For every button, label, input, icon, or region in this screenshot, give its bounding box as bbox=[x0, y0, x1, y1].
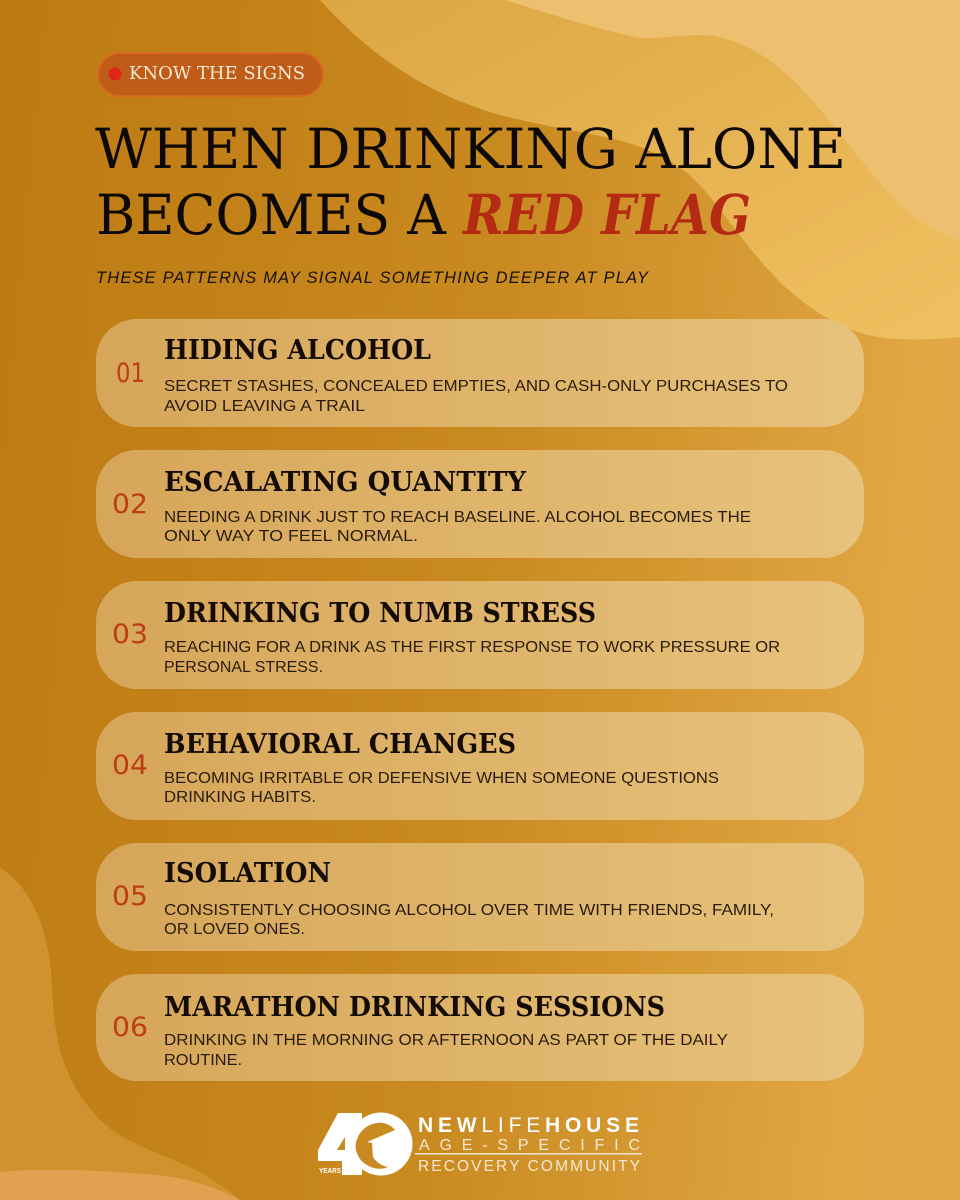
logo: New Life House bbox=[318, 1112, 642, 1176]
panel: sign 02 escalating quantity: NEEDING A DRINK JUST TO REACH BASELINE. ALCOHOL BECOMES THE bbox=[164, 509, 751, 526]
panel: sign 03 drinking to numb stress bbox=[96, 581, 864, 689]
logo: New Life House: RECOVERY COMMUNITY bbox=[418, 1158, 640, 1175]
panel: sign 06 marathon drinking sessions: 06 bbox=[112, 1012, 148, 1043]
subtitle: THESE PATTERNS MAY SIGNAL SOMETHING DEEPER AT PLAY bbox=[96, 269, 649, 287]
decorative blob: top right inner bbox=[505, 0, 960, 240]
title: BECOMES A bbox=[96, 183, 447, 247]
panel: sign 06 marathon drinking sessions: DRINKING IN THE MORNING OR AFTERNOON AS PART OF THE DAILY bbox=[164, 1032, 728, 1049]
panel: sign 02 escalating quantity: 02 bbox=[112, 489, 148, 520]
logo: New Life House: AGE-SPECIFIC bbox=[419, 1137, 640, 1154]
panel: sign 04 behavioral changes bbox=[96, 712, 864, 820]
panel: sign 03 drinking to numb stress: 03 bbox=[112, 619, 148, 650]
icon: 40 years mark bbox=[318, 1112, 412, 1176]
panel: sign 05 isolation: ISOLATION bbox=[164, 858, 331, 889]
panel: sign 06 marathon drinking sessions: ROUTINE. bbox=[164, 1052, 242, 1069]
badge: know the signs bbox=[98, 53, 323, 96]
panel: sign 01 hiding alcohol: HIDING ALCOHOL bbox=[164, 335, 431, 366]
title bbox=[95, 117, 846, 247]
decorative blob: bottom left corner bbox=[0, 1170, 240, 1200]
panel: sign 03 drinking to numb stress: PERSONAL STRESS. bbox=[164, 659, 323, 676]
decorative blob: bottom left bbox=[0, 868, 240, 1200]
panel: sign 05 isolation: 05 bbox=[112, 881, 148, 912]
panel: sign 05 isolation bbox=[96, 843, 864, 951]
panel: sign 06 marathon drinking sessions: MARATHON DRINKING SESSIONS bbox=[164, 992, 665, 1023]
decorative blob: top right outer bbox=[320, 0, 960, 340]
panel: sign 02 escalating quantity: ESCALATING QUANTITY bbox=[164, 467, 527, 498]
panel: sign 01 hiding alcohol: 01 bbox=[116, 358, 145, 389]
icon: 40 years mark: YEARS bbox=[319, 1166, 341, 1175]
panel: sign 06 marathon drinking sessions bbox=[96, 974, 864, 1081]
icon: red dot bbox=[108, 68, 122, 80]
panel: sign 02 escalating quantity: ONLY WAY TO FEEL NORMAL. bbox=[164, 528, 418, 545]
panel: sign 05 isolation: OR LOVED ONES. bbox=[164, 921, 305, 938]
title: WHEN DRINKING ALONE bbox=[95, 117, 846, 181]
panel: sign 04 behavioral changes: 04 bbox=[112, 750, 148, 781]
panel: sign 01 hiding alcohol: AVOID LEAVING A TRAIL bbox=[164, 398, 365, 415]
panel: sign 01 hiding alcohol bbox=[96, 319, 864, 427]
panel: sign 05 isolation: CONSISTENTLY CHOOSING ALCOHOL OVER TIME WITH FRIENDS, FAMILY, bbox=[164, 902, 774, 919]
panel: sign 03 drinking to numb stress: REACHING FOR A DRINK AS THE FIRST RESPONSE TO WORK PRESSURE OR bbox=[164, 639, 780, 656]
panel: sign 01 hiding alcohol: SECRET STASHES, CONCEALED EMPTIES, AND CASH-ONLY PURCHASES TO bbox=[164, 378, 788, 395]
panel: sign 04 behavioral changes: BEHAVIORAL CHANGES bbox=[164, 729, 516, 760]
panel: sign 03 drinking to numb stress: DRINKING TO NUMB STRESS bbox=[164, 598, 596, 629]
title: RED FLAG bbox=[461, 182, 751, 247]
panel: sign 04 behavioral changes: DRINKING HABITS. bbox=[164, 789, 316, 806]
panel: sign 02 escalating quantity bbox=[96, 450, 864, 558]
badge: know the signs: KNOW THE SIGNS bbox=[129, 63, 305, 84]
logo: New Life House: NEWLIFEHOUSE bbox=[418, 1114, 639, 1137]
panel: sign 04 behavioral changes: BECOMING IRRITABLE OR DEFENSIVE WHEN SOMEONE QUESTIONS bbox=[164, 770, 719, 787]
